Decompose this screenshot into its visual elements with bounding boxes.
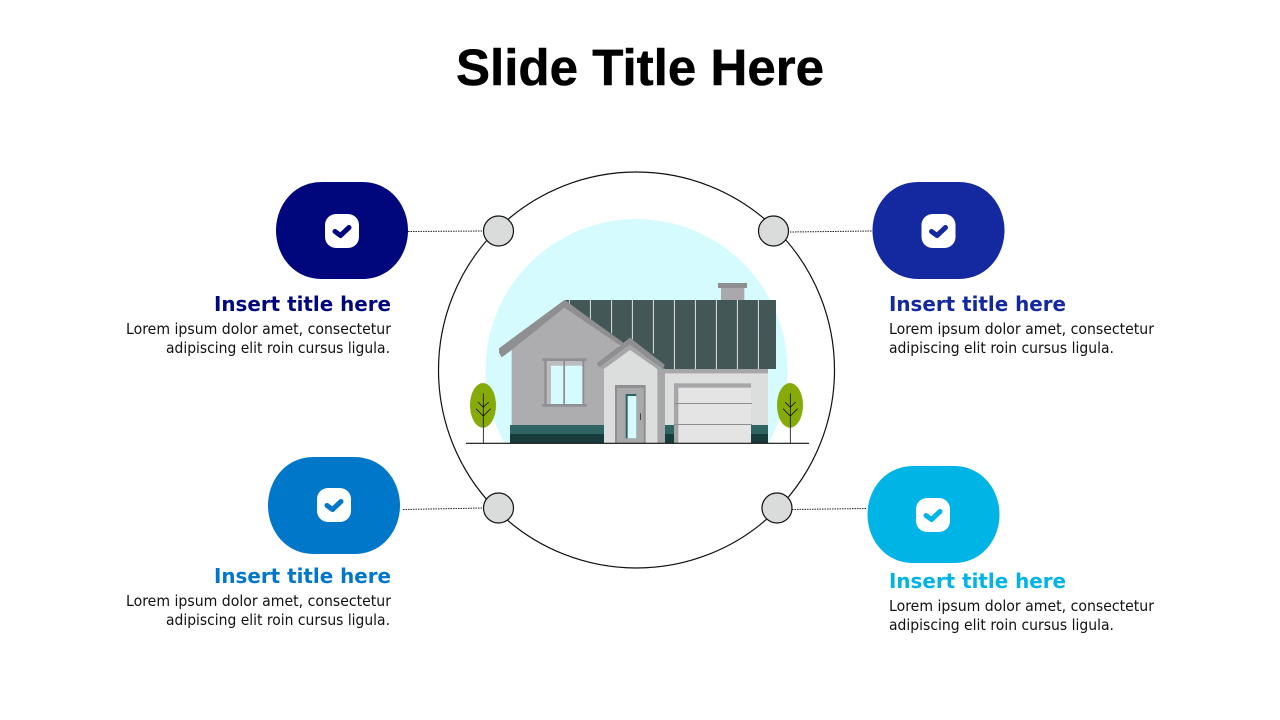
left tree (470, 383, 496, 443)
panel: top right (872, 182, 1155, 357)
house illustration (466, 283, 809, 443)
text: bottom left (126, 592, 392, 629)
text: bottom right (889, 597, 1155, 634)
text: top left (126, 320, 392, 357)
text: top left: adipiscing elit roin cursus ligula. (166, 339, 390, 357)
text: top right: adipiscing elit roin cursus ligula. (889, 339, 1114, 357)
badge: top right (872, 182, 1004, 279)
text: bottom left: adipiscing elit roin cursus ligula. (166, 611, 390, 629)
heading: top left: Insert title here (214, 292, 391, 316)
ground line (466, 442, 809, 445)
panel: bottom left (126, 457, 400, 629)
main wall (510, 306, 620, 443)
text: top right (889, 320, 1155, 357)
icon: check top right (922, 214, 956, 248)
panel: bottom right (868, 466, 1155, 634)
heading: bottom right: Insert title here (889, 569, 1066, 593)
window (542, 358, 587, 407)
ring nodes (484, 216, 792, 523)
badge: bottom right (868, 466, 1000, 563)
gable trim (499, 300, 623, 357)
central ring (438, 172, 834, 568)
right tree (777, 383, 803, 443)
panel: top left (126, 182, 408, 357)
icon: check top left (325, 214, 359, 248)
connector lines (403, 231, 872, 510)
text: top right: Lorem ipsum dolor amet, consectetur (889, 320, 1155, 338)
heading: top right: Insert title here (889, 292, 1066, 316)
light blue backdrop (486, 219, 788, 443)
text: bottom right: Lorem ipsum dolor amet, consectetur (889, 597, 1155, 615)
garage door (674, 383, 752, 443)
text: bottom left: Lorem ipsum dolor amet, consectetur (126, 592, 392, 610)
chimney (718, 283, 747, 301)
porch (597, 338, 665, 443)
badge: bottom left (268, 457, 400, 554)
heading: bottom left: Insert title here (214, 564, 391, 588)
icon: check bottom right (916, 498, 950, 532)
badge: top left (276, 182, 408, 279)
title: Slide Title Here (456, 39, 824, 96)
garage wall (664, 369, 768, 443)
front door (615, 385, 646, 443)
text: top left: Lorem ipsum dolor amet, consectetur (126, 320, 392, 338)
icon: check bottom left (317, 488, 351, 522)
text: bottom right: adipiscing elit roin cursus ligula. (889, 616, 1114, 634)
main roof (565, 300, 776, 369)
